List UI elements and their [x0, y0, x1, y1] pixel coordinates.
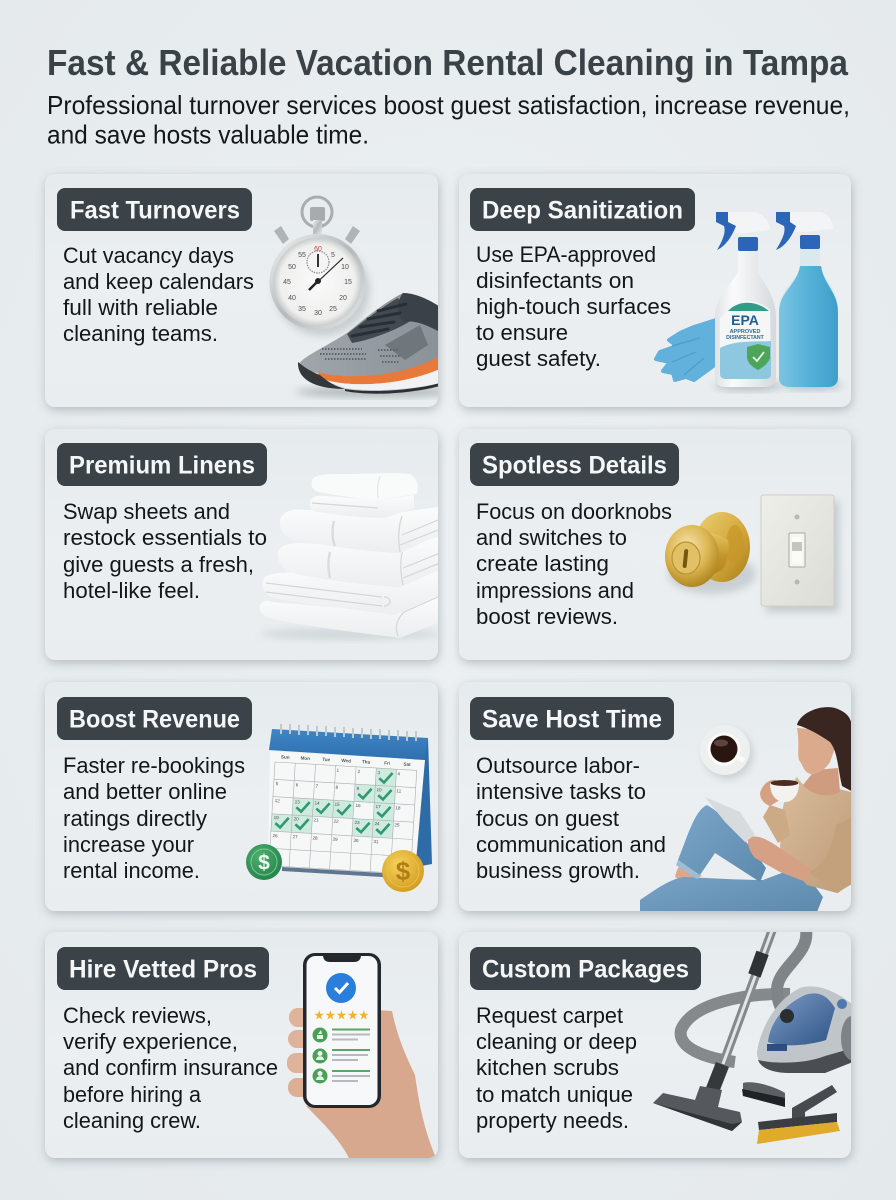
- calendar grid: 11: [396, 788, 402, 794]
- icon: stopwatch: 45: [283, 279, 291, 286]
- panel: spotless details: [459, 429, 851, 660]
- icon: blue gloves: [656, 320, 716, 380]
- text: hire vetted pros: Check reviews,: [63, 1003, 212, 1028]
- icon: stopwatch: 15: [344, 279, 352, 286]
- calendar grid: 21: [313, 817, 319, 823]
- calendar grid: 3: [377, 770, 381, 775]
- heading: save host time: Save Host Time: [482, 706, 662, 734]
- text: premium linens: hotel-like feel.: [63, 578, 200, 603]
- gold dollar coin: $: [396, 856, 411, 886]
- heading: spotless details: [470, 443, 679, 486]
- icon: vacuum cleaner and brushes: [653, 928, 863, 1144]
- text: premium linens: Swap sheets and: [63, 499, 230, 524]
- icon: stopwatch: 50: [288, 264, 296, 271]
- icon: white spray bottle with EPA label: DISINFECTANT: [726, 335, 765, 341]
- calendar grid: 23: [354, 820, 360, 825]
- heading: hire vetted pros: Hire Vetted Pros: [69, 956, 257, 984]
- icon: stopwatch: 5: [331, 252, 335, 259]
- text: save host time: [476, 753, 666, 883]
- text: deep sanitization: Use EPA-approved: [476, 242, 656, 267]
- panel: hire vetted pros: [45, 932, 438, 1160]
- text: deep sanitization: disinfectants on: [476, 268, 634, 293]
- calendar grid: 9: [356, 786, 360, 791]
- icon: running shoe: [295, 293, 455, 397]
- text: deep sanitization: guest safety.: [476, 346, 601, 371]
- calendar grid: 14: [314, 800, 320, 806]
- calendar grid: 5: [276, 781, 279, 786]
- text: save host time: Outsource labor-: [476, 753, 640, 778]
- calendar grid: 8: [335, 785, 339, 790]
- text: save host time: communication and: [476, 832, 666, 857]
- text: custom packages: [476, 1003, 637, 1133]
- gold dollar coin: [382, 850, 424, 892]
- text: save host time: focus on guest: [476, 806, 620, 831]
- calendar grid: 19: [274, 815, 279, 820]
- panel: boost revenue: [45, 682, 438, 911]
- scrub brush two: [757, 1085, 840, 1144]
- text: fast turnovers: and keep calendars: [63, 269, 254, 294]
- calendar grid: 2: [357, 769, 361, 774]
- heading: deep sanitization: Deep Sanitization: [482, 196, 683, 224]
- icon: stopwatch: 25: [329, 306, 337, 313]
- calendar grid: 6: [296, 782, 299, 787]
- calendar grid: Sat: [403, 762, 411, 767]
- subtitle: Professional turnover services boost guest satisfaction, increase revenue,: [47, 90, 850, 120]
- icon: stacked towels: [260, 473, 440, 640]
- text: boost revenue: Faster re-bookings: [63, 753, 245, 778]
- text: spotless details: and switches to: [476, 525, 627, 550]
- text: custom packages: to match unique: [476, 1082, 633, 1107]
- phone: [303, 953, 381, 1108]
- icon: stopwatch: [270, 197, 370, 336]
- icon: white spray bottle with EPA label: EPA: [731, 312, 759, 328]
- calendar grid: 26: [272, 833, 278, 838]
- text: boost revenue: and better online: [63, 779, 227, 804]
- icon: stopwatch: 20: [339, 295, 347, 302]
- panel: deep sanitization: [459, 174, 851, 407]
- calendar grid: 20: [294, 816, 299, 822]
- icon: blue spray bottle: [776, 212, 842, 390]
- subtitle: [47, 90, 850, 150]
- heading: custom packages: Custom Packages: [482, 956, 689, 984]
- calendar grid: Fri: [384, 760, 390, 766]
- calendar grid: 29: [332, 837, 338, 842]
- calendar grid: 16: [355, 803, 361, 808]
- calendar grid: Tue: [322, 757, 331, 762]
- icon: hand holding phone: [287, 953, 436, 1160]
- calendar grid: 18: [395, 805, 401, 811]
- icon: calendar with check marks and coins: [246, 724, 432, 892]
- text: custom packages: kitchen scrubs: [476, 1055, 619, 1080]
- text: boost revenue: increase your: [63, 832, 194, 857]
- icon: white spray bottle with EPA label: APPROVED: [730, 329, 760, 335]
- calendar grid: 28: [312, 835, 318, 841]
- calendar grid: 27: [292, 834, 298, 839]
- panel: save host time: [459, 682, 855, 912]
- text: deep sanitization: high-touch surfaces: [476, 294, 671, 319]
- text: hire vetted pros: before hiring a: [63, 1082, 201, 1107]
- five stars: ★★★★★: [314, 1008, 370, 1024]
- calendar grid: Thu: [362, 759, 371, 765]
- heading: boost revenue: [57, 697, 252, 740]
- vacuum hose: [681, 994, 790, 1062]
- text: hire vetted pros: and confirm insurance: [63, 1055, 278, 1080]
- illustration: woman with coffee and tablet: [640, 707, 855, 912]
- calendar grid: [269, 754, 417, 874]
- text: fast turnovers: full with reliable: [63, 295, 218, 320]
- icon: stopwatch: 30: [314, 310, 322, 317]
- icon: stopwatch: 40: [288, 295, 296, 302]
- panel: fast turnovers: [45, 174, 455, 407]
- icon: brass doorknob: [665, 512, 756, 594]
- title: Fast & Reliable Vacation Rental Cleaning in Tampa: [47, 42, 849, 83]
- heading: deep sanitization: [470, 188, 695, 231]
- text: save host time: intensive tasks to: [476, 779, 646, 804]
- calendar grid: 25: [394, 822, 400, 828]
- text: boost revenue: ratings directly: [63, 806, 208, 831]
- heading: hire vetted pros: [57, 947, 269, 990]
- green dollar coin: [246, 844, 282, 880]
- text: spotless details: [476, 499, 672, 629]
- vacuum pole: [723, 928, 773, 1064]
- icon: coffee cup on saucer: [700, 725, 753, 779]
- text: premium linens: restock essentials to: [63, 525, 267, 550]
- green dollar coin: $: [258, 852, 270, 874]
- verified badge: [326, 973, 356, 1003]
- text: boost revenue: rental income.: [63, 858, 200, 883]
- heading: custom packages: [470, 947, 701, 990]
- calendar grid: 15: [334, 802, 340, 807]
- text: custom packages: property needs.: [476, 1108, 629, 1133]
- text: save host time: business growth.: [476, 858, 640, 883]
- text: hire vetted pros: [63, 1003, 278, 1133]
- calendar grid: 22: [333, 819, 339, 824]
- heading: premium linens: Premium Linens: [69, 452, 255, 480]
- vacuum body: [757, 986, 851, 1073]
- text: spotless details: create lasting: [476, 551, 609, 576]
- text: hire vetted pros: verify experience,: [63, 1029, 238, 1054]
- heading: fast turnovers: Fast Turnovers: [70, 196, 240, 224]
- text: fast turnovers: Cut vacancy days: [63, 243, 234, 268]
- text: spotless details: impressions and: [476, 578, 634, 603]
- calendar grid: 10: [376, 787, 382, 792]
- heading: boost revenue: Boost Revenue: [69, 706, 240, 734]
- floor nozzle: [653, 1086, 742, 1131]
- subtitle: and save hosts valuable time.: [47, 120, 369, 150]
- text: boost revenue: [63, 753, 245, 883]
- calendar grid: 12: [275, 798, 280, 803]
- heading: spotless details: Spotless Details: [482, 452, 667, 480]
- icon: stopwatch: 10: [341, 264, 349, 271]
- icon: light switch: [761, 495, 839, 612]
- panel: custom packages: [459, 928, 863, 1158]
- text: deep sanitization: to ensure: [476, 320, 568, 345]
- review rows: [312, 1028, 370, 1084]
- calendar grid: 7: [316, 783, 319, 789]
- calendar grid: Mon: [300, 756, 310, 761]
- calendar grid: Sun: [281, 754, 290, 760]
- calendar grid: 31: [373, 839, 379, 844]
- calendar grid: 24: [374, 821, 380, 826]
- icon: stopwatch: 60: [314, 246, 322, 253]
- icon: stopwatch: 35: [298, 306, 306, 313]
- calendar grid: 17: [375, 804, 381, 809]
- text: fast turnovers: [63, 243, 254, 346]
- text: custom packages: cleaning or deep: [476, 1029, 637, 1054]
- calendar grid: 13: [295, 799, 300, 805]
- heading: save host time: [470, 697, 674, 740]
- calendar grid: 1: [336, 768, 340, 773]
- calendar grid: 30: [353, 838, 359, 843]
- text: premium linens: [63, 499, 267, 603]
- text: spotless details: Focus on doorknobs: [476, 499, 672, 524]
- text: hire vetted pros: cleaning crew.: [63, 1108, 201, 1133]
- text: deep sanitization: [476, 242, 671, 371]
- icon: stopwatch: 55: [298, 252, 306, 259]
- text: spotless details: boost reviews.: [476, 604, 618, 629]
- calendar grid: 4: [397, 771, 401, 776]
- text: fast turnovers: cleaning teams.: [63, 321, 218, 346]
- scrub brush one: [742, 1082, 785, 1107]
- text: custom packages: Request carpet: [476, 1003, 624, 1028]
- heading: premium linens: [57, 443, 267, 486]
- panel: premium linens: [45, 429, 440, 660]
- calendar grid: Wed: [341, 758, 351, 764]
- calendar rings: [281, 724, 416, 741]
- icon: white spray bottle with EPA label: [714, 212, 782, 391]
- heading: fast turnovers: [57, 188, 252, 231]
- text: premium linens: give guests a fresh,: [63, 552, 254, 577]
